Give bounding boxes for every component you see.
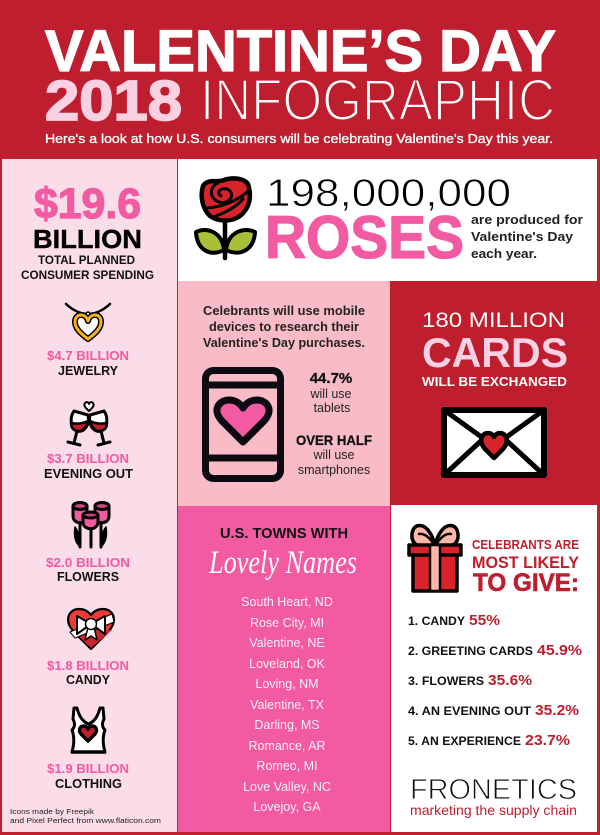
flowers amount	[46, 555, 130, 584]
list: evening out: 4. AN EVENING OUT	[408, 704, 532, 718]
smartphone stat: smartphones	[298, 463, 370, 477]
heading: lovely names: Lovely Names	[208, 545, 357, 581]
list: experience: 23.7%	[525, 732, 570, 749]
clothing amount	[47, 761, 129, 791]
jewelry amount	[47, 348, 129, 378]
logo: Fronetics: marketing the supply chain	[410, 802, 577, 818]
clothing amount: CLOTHING	[55, 776, 122, 791]
tablet stat: tablets	[314, 401, 350, 415]
total spending: $19.6	[34, 180, 141, 228]
logo: Fronetics: FRONETICS	[410, 774, 577, 806]
icon: heart necklace	[66, 304, 110, 339]
title: Infographic: INFOGRAPHIC	[200, 68, 555, 133]
heading: likely to give	[472, 537, 580, 597]
smartphone stat: will use	[312, 448, 355, 462]
clothing amount: $1.9 BILLION	[47, 761, 129, 776]
icon credits: and Pixel Perfect from www.flaticon.com	[10, 816, 161, 825]
roses note: each year.	[471, 246, 537, 261]
heading: towns: U.S. TOWNS WITH	[220, 525, 348, 542]
cards text: WILL BE EXCHANGED	[422, 374, 567, 389]
panel: most likely to give	[391, 505, 597, 832]
evening out amount: $3.7 BILLION	[47, 451, 129, 466]
cards text: 180 MILLION	[422, 309, 565, 332]
tablet stat: 44.7%	[310, 370, 352, 387]
smartphone stat: OVER HALF	[296, 432, 372, 448]
stat: 198,000,000: 198,000,000	[266, 172, 511, 215]
list: flowers: 35.6%	[488, 672, 532, 689]
panel: roses	[178, 159, 597, 281]
list: flowers: 3. FLOWERS	[408, 674, 484, 688]
subtitle: Here's a look at how U.S. consumers will be celebrating Valentine's Day this year.	[45, 131, 553, 146]
jewelry amount: JEWELRY	[58, 363, 118, 378]
icon: flowers	[73, 502, 109, 547]
heading: roses: ROSES	[265, 204, 464, 271]
heading: likely to give: MOST LIKELY	[472, 553, 580, 572]
icon: wine glasses	[68, 402, 110, 445]
town list	[241, 595, 333, 814]
icon: gift	[409, 525, 461, 591]
list: experience: 5. AN EXPERIENCE	[408, 734, 521, 748]
icon: candy heart box	[68, 609, 114, 649]
list: greeting cards	[408, 642, 582, 659]
town list: Romeo, MI	[256, 759, 318, 773]
icon: phone with heart	[205, 370, 281, 478]
smartphone stat	[296, 432, 372, 477]
candy amount: $1.8 BILLION	[47, 658, 129, 673]
list: evening out	[408, 702, 579, 719]
icon: tank top	[71, 708, 106, 752]
roses note	[471, 212, 583, 261]
town list: South Heart, ND	[241, 595, 333, 609]
panel: mobile devices	[178, 281, 390, 506]
town list: Loving, NM	[255, 677, 319, 691]
cards text	[422, 309, 568, 389]
total spending: TOTAL PLANNED	[38, 255, 135, 267]
panel: towns	[178, 506, 390, 832]
mobile intro	[203, 303, 365, 350]
list: experience	[408, 732, 570, 749]
candy amount	[47, 658, 129, 687]
tablet stat: will use	[310, 387, 352, 401]
town list: Valentine, NE	[249, 636, 325, 650]
list: candy	[408, 612, 500, 629]
header	[1, 1, 599, 159]
list: candy: 55%	[469, 612, 500, 629]
panel: cards	[391, 281, 597, 505]
list: candy: 1. CANDY	[408, 614, 465, 628]
mobile intro: devices to research their	[209, 319, 359, 334]
total spending	[21, 180, 154, 282]
town list: Loveland, OK	[249, 657, 326, 671]
list: evening out: 35.2%	[535, 702, 579, 719]
list: greeting cards: 45.9%	[537, 642, 582, 659]
evening out amount	[44, 451, 133, 481]
flowers amount: FLOWERS	[57, 569, 119, 584]
title: 2018: 2018	[45, 69, 182, 133]
town list: Valentine, TX	[250, 698, 325, 712]
town list: Darling, MS	[254, 718, 320, 732]
roses note: are produced for	[471, 212, 583, 227]
evening out amount: EVENING OUT	[44, 466, 133, 481]
town list: Lovejoy, GA	[253, 800, 321, 814]
list: flowers	[408, 672, 532, 689]
mobile intro: Celebrants will use mobile	[203, 303, 365, 318]
flowers amount: $2.0 BILLION	[46, 555, 130, 570]
icon credits: Icons made by Freepik	[10, 807, 94, 816]
mobile intro: Valentine's Day purchases.	[203, 335, 365, 350]
icon: rose	[196, 178, 255, 258]
icon: envelope	[444, 410, 544, 475]
tablet stat	[310, 370, 352, 415]
cards text: CARDS	[422, 329, 568, 376]
icon credits	[10, 807, 161, 825]
town list: Romance, AR	[248, 739, 326, 753]
heading: likely to give: TO GIVE:	[473, 569, 579, 597]
jewelry amount: $4.7 BILLION	[47, 348, 129, 363]
heading: likely to give: CELEBRANTS ARE	[472, 537, 579, 552]
roses note: Valentine's Day	[471, 229, 574, 244]
title: Valentine's Day: VALENTINE’S DAY	[45, 19, 556, 84]
total spending: CONSUMER SPENDING	[21, 270, 154, 282]
panel: consumer spending	[2, 159, 177, 832]
list: greeting cards: 2. GREETING CARDS	[408, 644, 533, 658]
town list: Rose City, MI	[250, 616, 324, 630]
total spending: BILLION	[33, 224, 142, 254]
town list: Love Valley, NC	[243, 780, 331, 794]
candy amount: CANDY	[66, 672, 110, 687]
